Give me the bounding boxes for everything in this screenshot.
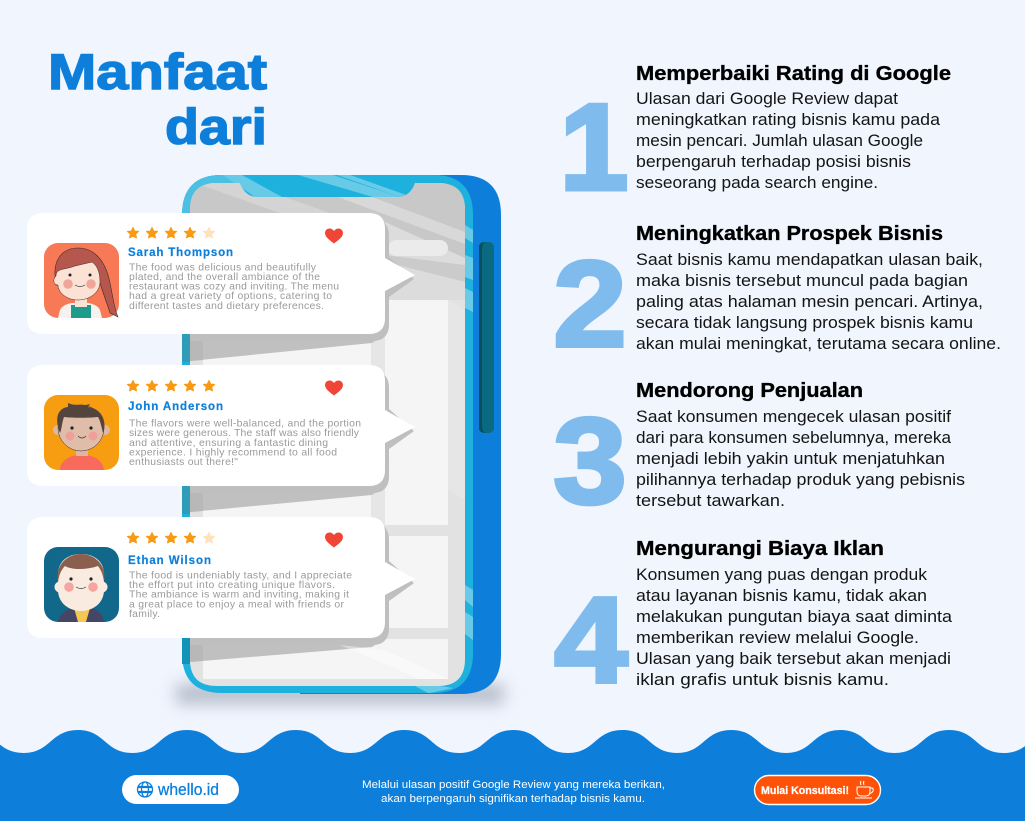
rating stars bbox=[127, 532, 215, 543]
body text: melakukan pungutan biaya saat diminta bbox=[636, 608, 953, 626]
benefit 4 bbox=[554, 537, 953, 708]
heart icon bbox=[325, 228, 343, 244]
benefit 3 bbox=[553, 379, 965, 529]
review text: restaurant was cozy and inviting. The menu bbox=[129, 282, 339, 292]
screen notch and glass glare bbox=[182, 175, 473, 197]
card shadow bbox=[190, 523, 414, 645]
avatar: Sarah bbox=[44, 243, 119, 318]
review text: sizes were generous. The staff was also friendly bbox=[129, 428, 360, 439]
body text: Ulasan dari Google Review dapat bbox=[636, 90, 898, 108]
icon: coffee cup bbox=[855, 781, 873, 798]
review text: The ambiance is warm and inviting, making it bbox=[129, 590, 349, 600]
avatar: Ethan bbox=[44, 547, 119, 622]
body text: Ulasan yang baik tersebut akan menjadi bbox=[636, 650, 951, 668]
card bbox=[27, 517, 415, 638]
body text: memberikan review melalui Google. bbox=[636, 629, 919, 647]
brand name: whello.id bbox=[157, 780, 219, 799]
body text: berpengaruh terhadap posisi bisnis bbox=[636, 153, 911, 171]
review text bbox=[129, 262, 339, 312]
number 1: 1 bbox=[560, 79, 628, 215]
review card: John Anderson bbox=[27, 365, 415, 493]
review text: different tastes and dietary preferences. bbox=[129, 301, 324, 312]
heading: Memperbaiki Rating di Google bbox=[636, 62, 951, 85]
review text: had a great variety of options, catering to bbox=[129, 291, 332, 302]
phone ground shadow bbox=[176, 684, 504, 704]
brand pill: whello.id bbox=[122, 775, 239, 804]
card shadow bbox=[190, 371, 414, 493]
footer message: akan berpengaruh signifikan terhadap bisnis kamu. bbox=[381, 793, 645, 805]
icon: globe bbox=[138, 782, 152, 797]
review text: plated, and the overall ambiance of the bbox=[129, 272, 320, 283]
body text: menjadi lebih yakin untuk menjatuhkan bbox=[636, 450, 945, 468]
heading: Mengurangi Biaya Iklan bbox=[636, 537, 884, 560]
body text: dari para konsumen sebelumnya, mereka bbox=[636, 429, 952, 447]
title: Manfaat bbox=[48, 44, 267, 100]
benefit 1 bbox=[560, 62, 951, 215]
review text: experience. I highly recommend to all food bbox=[129, 448, 337, 458]
review text: The food is undeniably tasty, and I appreciate bbox=[129, 570, 352, 582]
frame glare strips bbox=[415, 225, 473, 693]
body text: Saat bisnis kamu mendapatkan ulasan baik, bbox=[636, 251, 983, 269]
side button bbox=[479, 242, 494, 433]
review card: Ethan Wilson bbox=[27, 517, 415, 645]
reviewer name: Ethan Wilson bbox=[128, 555, 211, 567]
avatar: John bbox=[44, 395, 119, 470]
button label: Mulai Konsultasi! bbox=[761, 785, 849, 797]
rating stars bbox=[127, 380, 215, 391]
heading: Mendorong Penjualan bbox=[636, 379, 863, 402]
body text bbox=[636, 90, 941, 192]
body text: iklan grafis untuk bisnis kamu. bbox=[636, 671, 889, 689]
footer message bbox=[362, 779, 665, 805]
number 3: 3 bbox=[553, 393, 627, 529]
review text bbox=[129, 418, 361, 468]
body text bbox=[636, 251, 1001, 353]
review text: The flavors were well-balanced, and the portion bbox=[129, 418, 361, 430]
card bbox=[27, 365, 415, 486]
consultation button bbox=[754, 776, 880, 804]
card bbox=[27, 213, 415, 334]
heart icon bbox=[325, 380, 343, 396]
number 4: 4 bbox=[554, 572, 628, 708]
footer wave band bbox=[0, 730, 1025, 821]
body text: maka bisnis tersebut muncul pada bagian bbox=[636, 272, 968, 290]
body text: seseorang pada search engine. bbox=[636, 174, 878, 192]
benefit 2 bbox=[553, 222, 1001, 372]
review card: Sarah Thompson bbox=[27, 213, 415, 341]
heart icon bbox=[325, 532, 343, 548]
phone illustration bbox=[176, 175, 504, 704]
heading: Meningkatkan Prospek Bisnis bbox=[636, 222, 943, 245]
phone frame bbox=[182, 175, 473, 693]
body text: Konsumen yang puas dengan produk bbox=[636, 566, 928, 584]
body text bbox=[636, 408, 965, 510]
phone screen bbox=[190, 183, 465, 690]
review text: a great place to enjoy a meal with friends or bbox=[129, 600, 345, 610]
rating stars bbox=[127, 228, 215, 238]
body text: paling atas halaman mesin pencari. Artinya, bbox=[636, 293, 983, 311]
number 2: 2 bbox=[553, 236, 627, 372]
review text: enthusiasts out there!" bbox=[129, 457, 238, 468]
review text: The food was delicious and beautifully bbox=[129, 262, 317, 274]
frame corner highlight bbox=[182, 175, 216, 213]
review text: the effort put into creating unique flavors. bbox=[129, 580, 335, 591]
body text: meningkatkan rating bisnis kamu pada bbox=[636, 111, 941, 129]
review text bbox=[129, 570, 352, 620]
body text: Saat konsumen mengecek ulasan positif bbox=[636, 408, 951, 426]
body text: secara tidak langsung prospek bisnis kamu bbox=[636, 314, 973, 332]
body text: pilihannya terhadap produk yang pebisnis bbox=[636, 471, 965, 489]
review text: and attentive, ensuring a fantastic dining bbox=[129, 438, 328, 449]
body text: atau layanan bisnis kamu, tidak akan bbox=[636, 587, 927, 605]
reviewer name: John Anderson bbox=[128, 401, 223, 413]
title bbox=[48, 44, 267, 155]
reviewer name: Sarah Thompson bbox=[128, 247, 233, 259]
body text: tersebut tawarkan. bbox=[636, 492, 785, 510]
review text: family. bbox=[129, 609, 160, 620]
body text: mesin pencari. Jumlah ulasan Google bbox=[636, 132, 923, 150]
body text: akan mulai meningkat, terutama secara online. bbox=[636, 335, 1001, 353]
frame shadow strips bbox=[182, 334, 190, 664]
card shadow bbox=[190, 219, 414, 341]
title: dari bbox=[165, 99, 267, 155]
body text bbox=[636, 566, 953, 689]
phone body bbox=[300, 175, 501, 694]
footer message: Melalui ulasan positif Google Review yang mereka berikan, bbox=[362, 779, 665, 791]
